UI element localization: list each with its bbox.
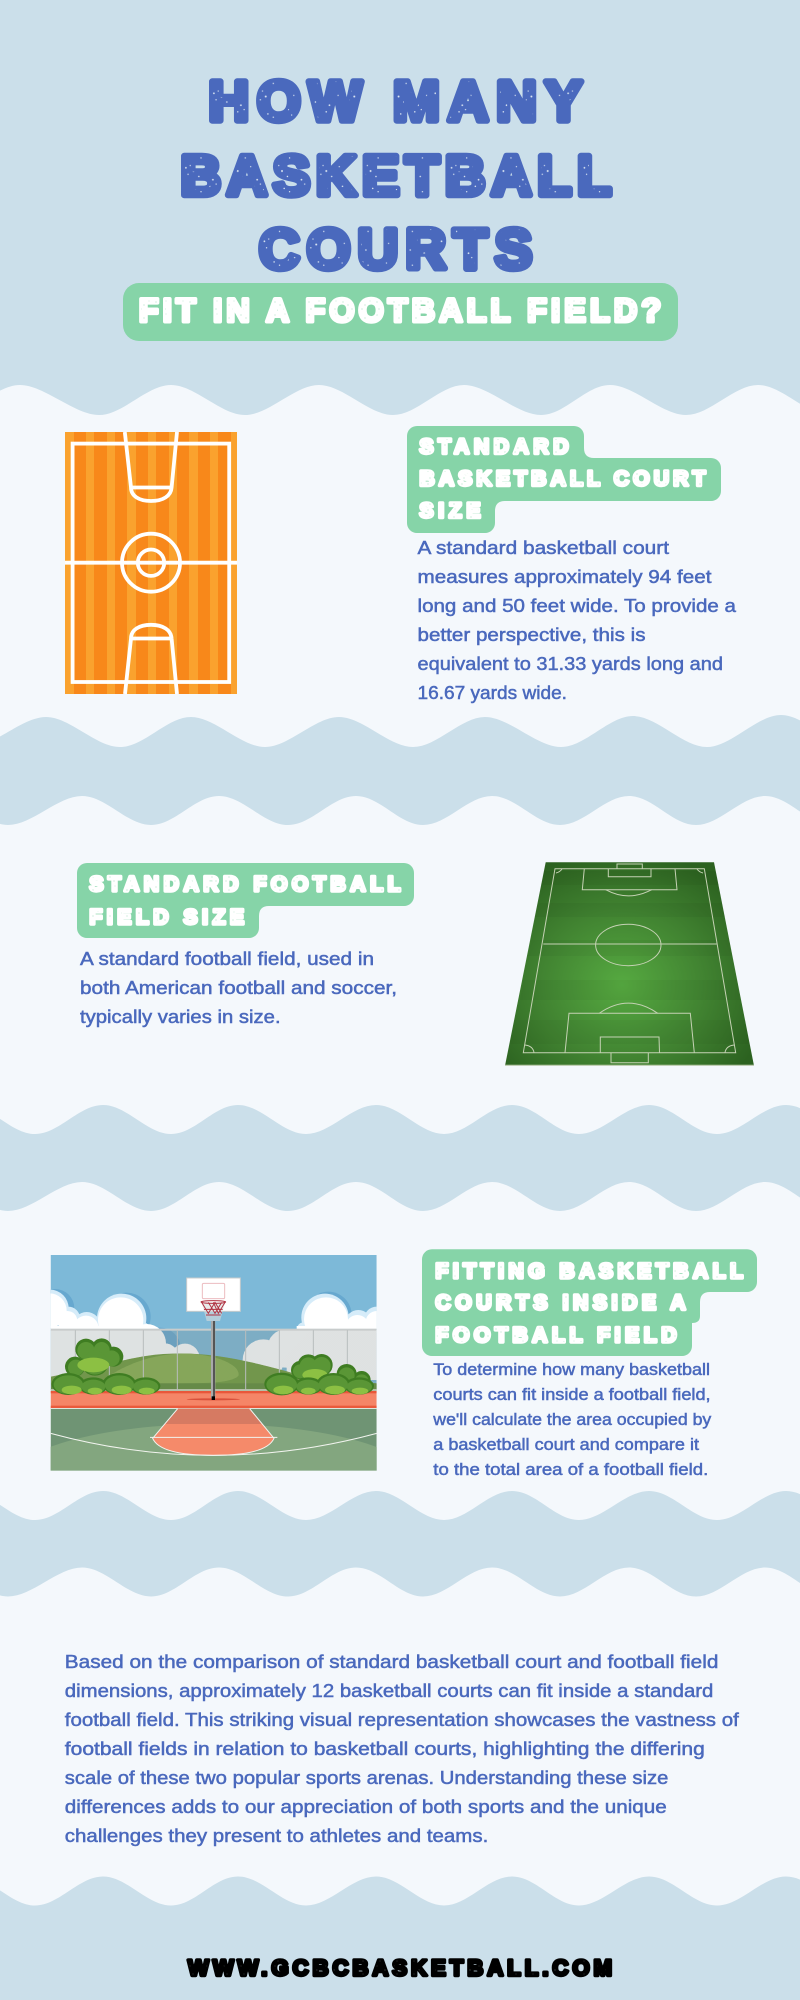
text: football field description: typically varies in size. [80, 1006, 281, 1027]
icon: basketball court [65, 432, 237, 694]
heading: standard football field size: FIELD SIZE [90, 906, 244, 929]
panel: conclusion section background [0, 1568, 800, 1906]
text: fitting courts description: courts can fit inside a football field, [433, 1386, 711, 1404]
text: basketball court description: long and 50 feet wide. To provide a [418, 595, 737, 616]
heading: standard basketball court size: BASKETBALL COURT [420, 468, 706, 490]
heading: standard basketball court size: STANDARD [420, 436, 568, 458]
title: HOW MANY [208, 69, 582, 133]
heading: standard basketball court size: SIZE [420, 500, 480, 522]
panel: fitting courts section background [0, 1182, 800, 1520]
heading: standard football field size: STANDARD FOOTBALL [90, 873, 401, 896]
text: fitting courts description [432, 1361, 712, 1479]
title [180, 69, 611, 281]
subtitle pill: FIT IN A FOOTBALL FIELD? [139, 292, 661, 328]
text: conclusion: football fields in relation to basketball courts, highlighting the differing [65, 1738, 705, 1759]
orange floor [51, 1391, 377, 1408]
text: basketball court description: measures approximately 94 feet [418, 566, 712, 587]
heading: standard football field size [77, 863, 414, 938]
text: basketball court description [418, 537, 737, 703]
heading: fitting basketball courts: COURTS INSIDE A [436, 1292, 686, 1314]
text: conclusion: football field. This striking visual representation showcases the vastness of [65, 1709, 740, 1730]
panel: football field section background [0, 796, 800, 1134]
text: fitting courts description: a basketball court and compare it [433, 1436, 699, 1454]
text: fitting courts description: To determine how many basketball [433, 1361, 710, 1379]
title: COURTS [259, 217, 532, 281]
text: football field description [80, 948, 397, 1027]
green ground [51, 1408, 377, 1471]
bushes [52, 1338, 374, 1395]
title: BASKETBALL [180, 144, 611, 207]
heading: fitting basketball courts [422, 1249, 757, 1356]
text: basketball court description: 16.67 yards wide. [418, 682, 567, 703]
text: conclusion: challenges they present to athletes and teams. [65, 1825, 488, 1846]
footer website: WWW.GCBCBASKETBALL.COM [188, 1956, 612, 1980]
hill [51, 1353, 377, 1391]
illustration: basketball court scene [50, 1255, 377, 1471]
heading: standard basketball court size [407, 426, 721, 533]
subtitle pill [123, 283, 678, 341]
text: conclusion: differences adds to our appreciation of both sports and the unique [65, 1796, 667, 1817]
text: fitting courts description: we'll calculate the area occupied by [432, 1411, 712, 1429]
text: conclusion [65, 1651, 740, 1846]
text: conclusion: dimensions, approximately 12 basketball courts can fit inside a standard [65, 1680, 713, 1701]
text: football field description: both American football and soccer, [80, 977, 397, 998]
hoop [187, 1278, 240, 1400]
text: basketball court description: A standard basketball court [418, 537, 669, 558]
fence [51, 1329, 377, 1391]
text: football field description: A standard football field, used in [80, 948, 374, 969]
heading: fitting basketball courts: FITTING BASKETBALL [436, 1260, 743, 1283]
panel: basketball court section background [0, 385, 800, 747]
icon: football field [505, 862, 754, 1066]
text: fitting courts description: to the total area of a football field. [433, 1461, 708, 1479]
text: basketball court description: equivalent to 31.33 yards long and [418, 653, 723, 674]
text: conclusion: scale of these two popular sports arenas. Understanding these size [65, 1767, 668, 1788]
key [153, 1409, 274, 1455]
text: basketball court description: better perspective, this is [418, 624, 646, 645]
text: conclusion: Based on the comparison of standard basketball court and football field [65, 1651, 718, 1672]
clouds behind the fence [31, 1289, 389, 1381]
heading: fitting basketball courts: FOOTBALL FIELD [436, 1324, 676, 1347]
